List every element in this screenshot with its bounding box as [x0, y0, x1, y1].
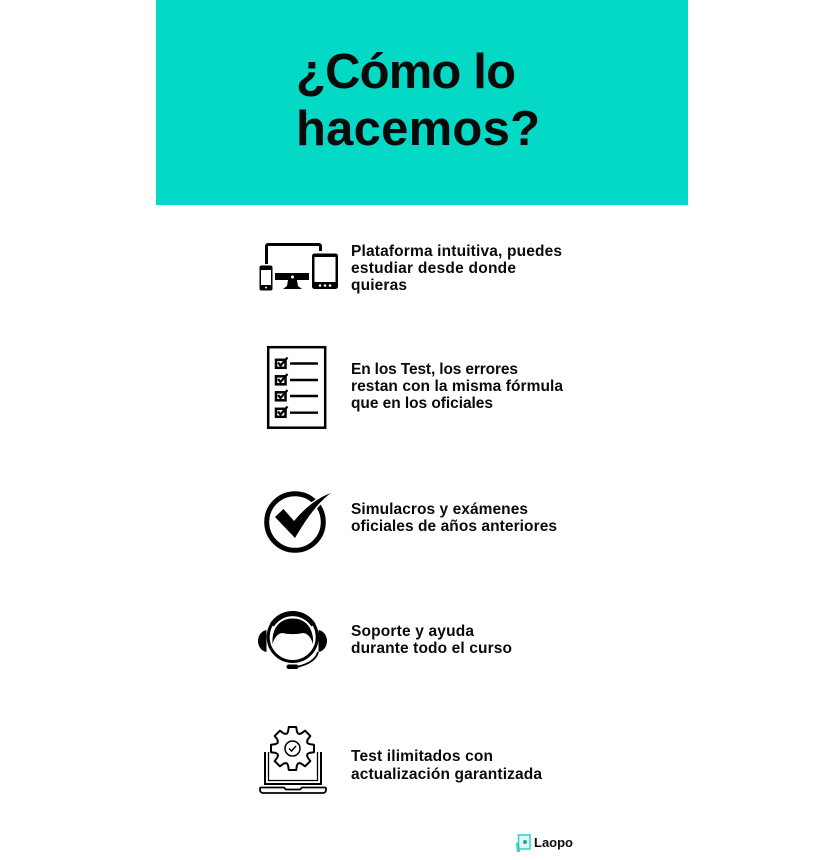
text: soporte: [351, 623, 512, 657]
icon: check in circle: [267, 493, 331, 550]
logo: Laopo: Laopo: [534, 835, 573, 850]
text: simulacros: oficiales de años anteriores: [351, 518, 557, 535]
logo: Laopo: [516, 835, 573, 852]
text: simulacros: [351, 501, 557, 535]
text: plataforma: Plataforma intuitiva, puedes: [351, 243, 562, 260]
header panel: [156, 0, 688, 205]
icon: checklist: [268, 347, 325, 428]
text: test errores: [351, 361, 563, 412]
text: soporte: Soporte y ayuda: [351, 623, 474, 640]
icon: headset agent: [258, 612, 327, 669]
text: plataforma: estudiar desde donde: [351, 260, 516, 277]
text: test ilimitados: Test ilimitados con: [351, 748, 493, 765]
text: test errores: En los Test, los errores: [351, 361, 518, 378]
icon: devices: [260, 244, 338, 290]
icon: laptop with gear: [260, 727, 326, 793]
text: simulacros: Simulacros y exámenes: [351, 501, 528, 518]
text: soporte: durante todo el curso: [351, 640, 512, 657]
title: [296, 45, 540, 156]
text: test ilimitados: [351, 748, 542, 783]
text: test errores: que en los oficiales: [351, 395, 493, 412]
text: plataforma: [351, 243, 562, 294]
text: test errores: restan con la misma fórmula: [351, 378, 563, 395]
text: test ilimitados: actualización garantizada: [351, 766, 542, 783]
title: hacemos?: [296, 102, 540, 156]
title: ¿Cómo lo: [296, 45, 516, 99]
text: plataforma: quieras: [351, 277, 407, 294]
